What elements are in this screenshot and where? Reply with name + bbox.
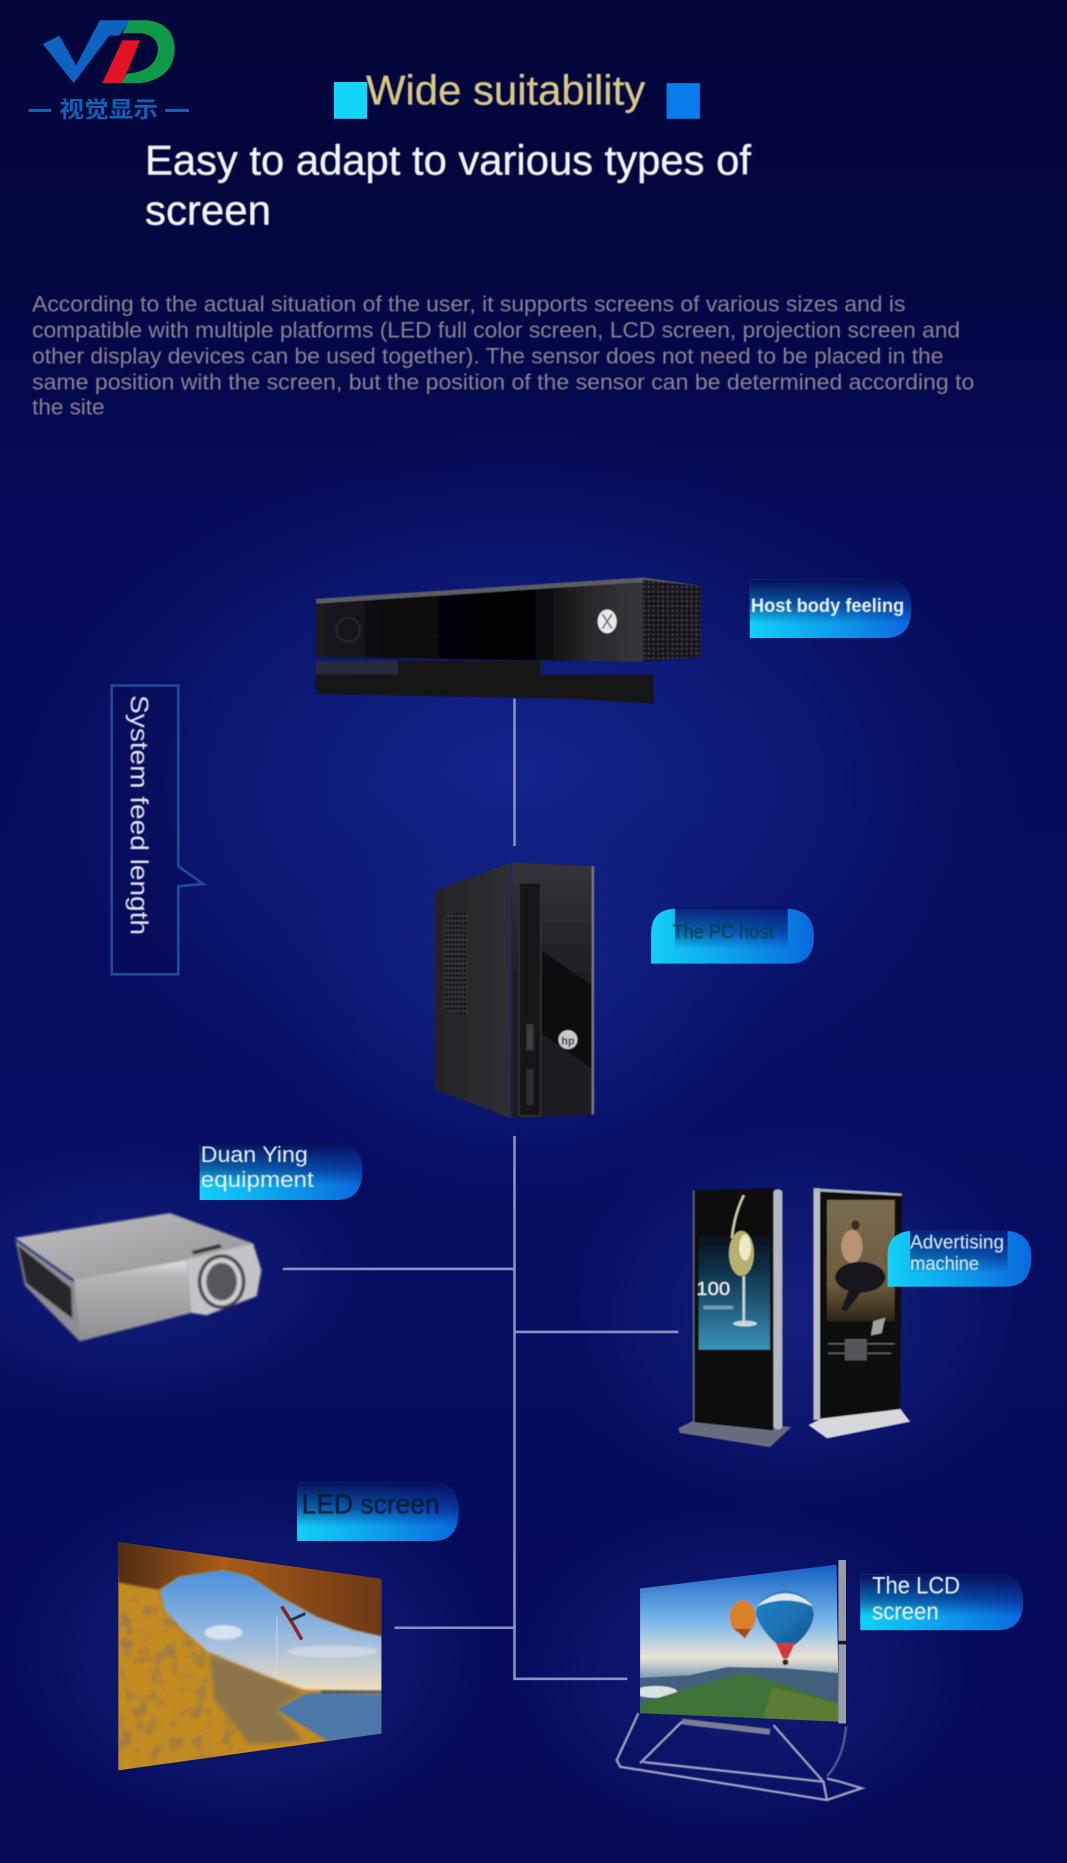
lcd panel [640,1564,838,1722]
lcd big balloon [756,1591,814,1646]
title with square markers [334,67,700,119]
wall cliff texture [118,1584,302,1768]
callout: Duan Ying equipment: equipment [201,1167,314,1192]
description paragraph [32,291,974,420]
heading [145,137,751,234]
tower vent [444,911,467,1017]
dancer figure [835,1220,885,1312]
kiosk screen [699,1236,770,1350]
sensor neck [316,661,542,675]
callout: the LCD screen: screen [872,1598,939,1625]
projector rear vents [15,1240,80,1341]
heading: Easy to adapt to various types of [145,137,751,184]
kiosk frame left [813,1188,820,1420]
kiosk logo patch [845,1339,867,1360]
icon: advertising kiosks [678,1188,910,1447]
bracket outline [112,686,203,974]
wall sky [160,1570,386,1692]
bracket label: System feed length [125,695,153,935]
kiosk body 1 [694,1188,774,1431]
wall rock arch [113,1539,386,1640]
wall climber [277,1606,305,1676]
icon: LCD screen on stand [617,1556,862,1800]
lcd mist [634,1686,677,1698]
sensor mesh side [643,580,701,662]
icon: PC tower [435,863,594,1118]
lcd stand [617,1713,862,1800]
heading: screen [145,187,271,234]
kiosk logo mark [871,1318,885,1335]
cyan marker [334,82,367,119]
kiosk screen number: 100 [696,1278,730,1299]
logo: VD visual display [29,20,189,123]
callout: advertising machine: machine [910,1254,979,1275]
callout: LED screen: LED screen [302,1489,440,1520]
callout: advertising machine: Advertising [910,1233,1004,1254]
callout: the PC host: The PC host [673,922,774,944]
callout: LED screen [297,1483,459,1541]
kiosk base 1 [678,1420,791,1447]
logo mark: red slash [102,40,140,83]
sensor bar [316,579,643,662]
description paragraph: the site [32,395,105,420]
wall cliff base [113,1539,386,1776]
icon: LED video wall [113,1539,386,1776]
tower side [435,863,511,1118]
projector top vent [191,1244,222,1255]
description paragraph: other display devices can be used together). The sensor does not need to be placed in the [32,344,943,369]
callout: Duan Ying equipment [200,1142,362,1200]
wall water [277,1692,386,1741]
kiosk photo [827,1200,895,1321]
description paragraph: compatible with multiple platforms (LED full color screen, LCD screen, projection screen and [32,317,960,342]
xbox logo [598,610,617,633]
wall headland [210,1654,303,1744]
lcd side frame [838,1560,846,1723]
logo text: 视觉显示 [59,98,158,123]
callout: Duan Ying equipment: Duan Ying [201,1142,308,1167]
icon: motion sensor [316,577,701,703]
title text: Wide suitability [366,67,645,114]
projector lens [198,1254,245,1309]
kiosk frame top [813,1188,902,1196]
callout: the PC host [651,907,814,964]
tower ports [526,1024,534,1050]
description paragraph: According to the actual situation of the user, it supports screens of various sizes and is [32,291,905,316]
projector front face [74,1260,191,1341]
callout: host body feeling [750,580,911,638]
icon: PC tower: hp [561,1035,575,1047]
lcd small balloon [730,1600,756,1634]
lcd green hills [640,1672,837,1718]
callout: host body feeling: Host body feeling [751,596,904,617]
description paragraph: same position with the screen, but the position of the sensor can be determined according to [32,370,974,395]
logo mark: V [43,20,131,83]
sensor mount [316,675,654,703]
lcd distant ridge [640,1666,838,1704]
kiosk text strokes [828,1344,895,1353]
callout: the LCD screen: The LCD [872,1572,960,1599]
connector lines [283,699,678,1679]
wine glass [729,1195,757,1327]
callout: the LCD screen [860,1572,1023,1630]
projector lens housing [187,1243,261,1315]
system feed length bracket [112,686,203,974]
logo side dashes [29,109,189,112]
kiosk small caption [703,1306,733,1309]
blue marker [667,83,700,119]
sensor lens [336,618,360,642]
logo mark: D [121,20,175,83]
kiosk body 2 [813,1188,902,1421]
tower front [512,863,593,1118]
kiosk base 2 [808,1408,910,1438]
callout: advertising machine [888,1231,1031,1287]
icon: projector [15,1213,261,1341]
projector top face [15,1213,253,1280]
HP logo [558,1030,577,1049]
